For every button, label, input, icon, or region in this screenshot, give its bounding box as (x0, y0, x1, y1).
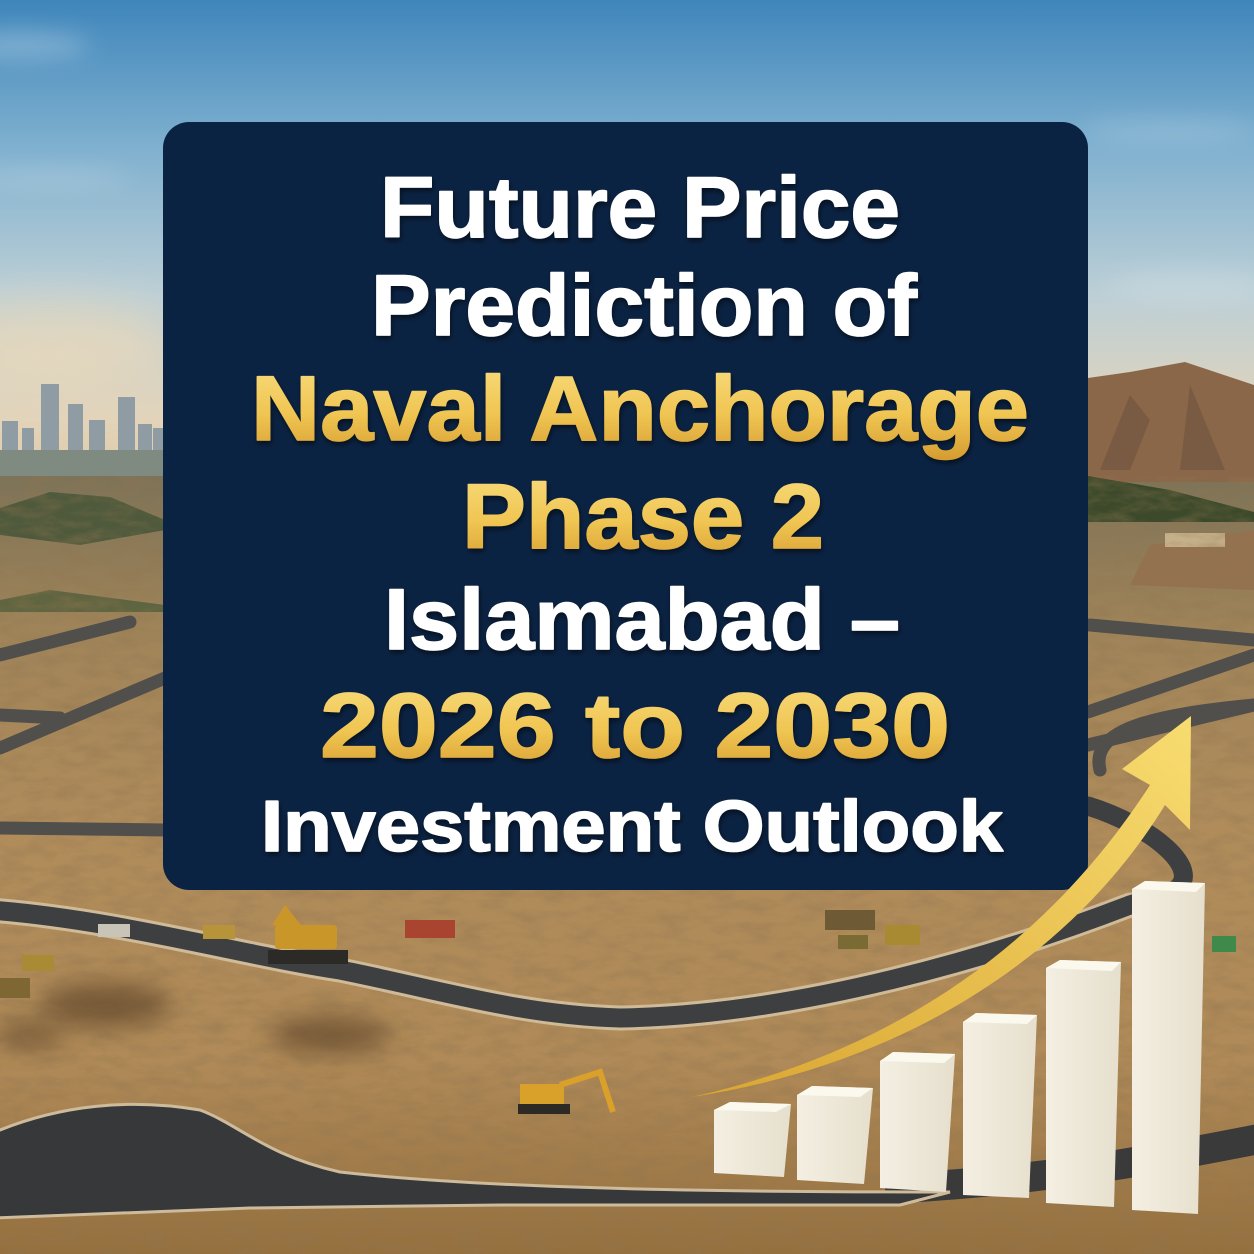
bar 5 (1046, 960, 1121, 1207)
background: dirt mounds (0, 983, 390, 1053)
background: soil texture (0, 476, 1254, 1254)
heading line: 2026 to 2030: 2026 to 2030 (320, 675, 950, 777)
background: sky (0, 0, 1254, 490)
heading line: Phase 2: Phase 2 (462, 466, 824, 568)
background: hills (0, 362, 1254, 612)
bar 4 (963, 1013, 1037, 1198)
background: city skyline (0, 384, 165, 484)
icon: excavator (518, 1072, 613, 1114)
heading line: Islamabad: Islamabad – (384, 572, 900, 668)
background: ground (0, 476, 1254, 1254)
background: roads (0, 622, 1254, 1218)
arrow: rising gold growth arrow (692, 716, 1191, 1097)
title (251, 160, 1029, 867)
heading line: Prediction of: Prediction of (371, 258, 917, 354)
heading line: Naval Anchorage: Naval Anchorage (251, 358, 1029, 460)
panel: title card (163, 122, 1088, 890)
heading line: Investment Outlook: Investment Outlook (261, 787, 1004, 867)
bar 2 (797, 1086, 873, 1184)
bar chart: rising white bars (714, 881, 1205, 1214)
bar 1 (714, 1102, 791, 1177)
bar 6 (1132, 881, 1205, 1214)
bar 3 (880, 1052, 955, 1192)
construction machines (0, 905, 1236, 1114)
heading line: Future Price: Future Price (380, 160, 900, 256)
